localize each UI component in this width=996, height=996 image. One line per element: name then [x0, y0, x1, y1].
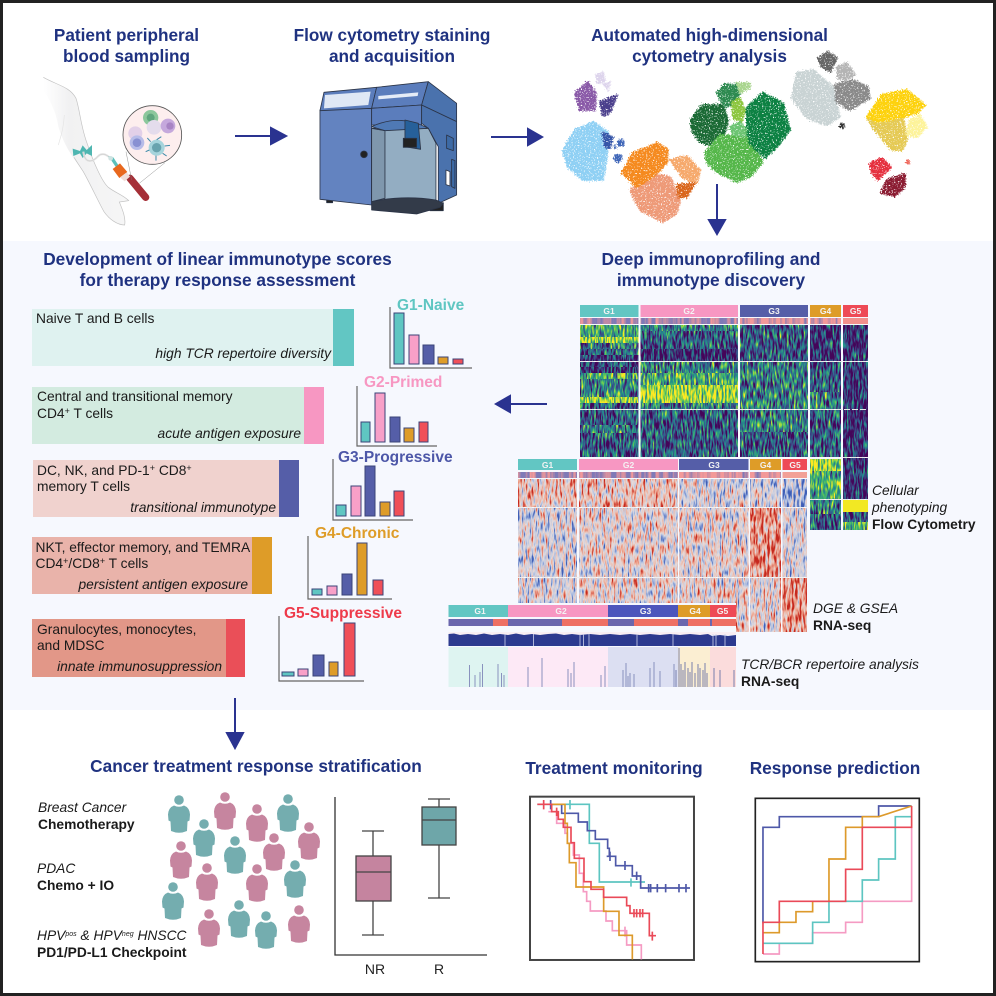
- heatmap: flow cytometry phenotyping: G2: [683, 306, 695, 316]
- chart: G4-Chronic bars: [308, 525, 400, 599]
- heatmap: flow cytometry phenotyping: [580, 305, 868, 530]
- panel: immunotype discovery band: [3, 241, 993, 710]
- panel: G2 primed description: Central and transitional memory: [37, 389, 233, 404]
- chart: G5-Suppressive bars: [279, 605, 402, 681]
- chart: TCR/BCR repertoire tracks: G2: [555, 606, 567, 616]
- panel: G4 chronic description: persistent antigen exposure: [77, 577, 248, 592]
- panel: G4 chronic description: NKT, effector memory, and TEMRA: [36, 540, 251, 555]
- panel: G3 progressive description: CD8: [155, 463, 187, 478]
- heading: deep immunoprofiling: Deep immunoprofiling and: [602, 249, 820, 269]
- chart: TCR/BCR repertoire tracks: [440, 603, 736, 693]
- heatmap: flow cytometry phenotyping: G5: [850, 306, 861, 316]
- heatmap: differential expression: G2: [623, 460, 634, 470]
- arrow: sampling to cytometer: [235, 128, 286, 144]
- chart: NR vs R box plot: NR: [365, 961, 385, 977]
- heatmap: flow cytometry phenotyping: G4: [820, 306, 831, 316]
- panel: G5 suppressive description: [32, 619, 245, 677]
- icon: arm with blood draw and tube: [43, 77, 182, 225]
- text: HNSCC cohort: pos: [64, 931, 77, 938]
- arrow: analysis to profiling: [709, 184, 725, 234]
- panel: G2 primed description: [32, 387, 324, 444]
- text: HNSCC cohort: & HPV: [77, 928, 124, 943]
- panel: G4 chronic description: [32, 537, 272, 594]
- panel: G4 chronic description: +: [100, 556, 105, 566]
- panel: G1 naive description: Naive T and B cells: [36, 311, 154, 326]
- panel: G3 progressive description: +: [150, 463, 155, 473]
- panel: G3 progressive description: DC, NK, and PD-1: [37, 463, 150, 478]
- text: HNSCC cohort: HPV: [37, 928, 67, 943]
- chart: TCR/BCR repertoire tracks: G5: [717, 606, 728, 616]
- heatmap: differential expression: G3: [708, 460, 720, 470]
- text: DGE label: RNA-seq: [813, 618, 871, 633]
- panel: G2 primed description: CD4: [37, 406, 65, 421]
- heading: automated analysis: Automated high-dimensional: [591, 25, 828, 45]
- chart: G4-Chronic bars: G4-Chronic: [315, 525, 400, 542]
- chart: G2-Primed bars: [357, 374, 442, 446]
- text: DGE label: DGE & GSEA: [813, 601, 898, 616]
- panel: G1 naive description: [32, 309, 354, 366]
- heading: flow cytometry: and acquisition: [329, 46, 455, 66]
- text: breast cancer cohort: Breast Cancer: [38, 800, 128, 815]
- panel: G4 chronic description: CD4: [36, 556, 63, 571]
- panel: G5 suppressive description: and MDSC: [37, 638, 105, 653]
- heatmap: differential expression: G1: [542, 460, 553, 470]
- panel: G1 naive description: high TCR repertoire diversity: [155, 346, 332, 361]
- heatmap: flow cytometry phenotyping: G1: [603, 306, 615, 316]
- heading: linear immunotype scores: Development of linear immunotype scores: [43, 249, 392, 269]
- panel: G2 primed description: acute antigen exposure: [158, 426, 301, 441]
- chart: G3-Progressive bars: G3-Progressive: [338, 449, 453, 466]
- text: HNSCC cohort: HNSCC: [134, 928, 188, 943]
- heading: blood sampling: Patient peripheral: [54, 25, 199, 45]
- panel: G4 chronic description: T cells: [105, 556, 148, 571]
- icon: flow cytometer: [320, 82, 457, 214]
- panel: G2 primed description: T cells: [70, 406, 113, 421]
- chart: TCR/BCR repertoire tracks: G1: [474, 606, 486, 616]
- heatmap: differential expression: [518, 459, 807, 632]
- text: cellular phenotyping label: phenotyping: [871, 500, 948, 515]
- text: HNSCC cohort: PD1/PD-L1 Checkpoint: [37, 945, 187, 960]
- heading: linear immunotype scores: for therapy response assessment: [80, 270, 356, 290]
- heading: cancer treatment stratification: Cancer treatment response stratification: [90, 756, 422, 776]
- text: PDAC cohort: PDAC: [37, 861, 76, 876]
- icons: patient cohort: [162, 792, 320, 949]
- panel: G4 chronic description: +: [63, 556, 68, 566]
- panel: G5 suppressive description: Granulocytes, monocytes,: [37, 622, 196, 637]
- heading: automated analysis: cytometry analysis: [632, 46, 787, 66]
- chart: TCR/BCR repertoire tracks: G4: [689, 606, 701, 616]
- chart: G1-Naive bars: [390, 297, 472, 368]
- heading: flow cytometry: Flow cytometry staining: [294, 25, 490, 45]
- panel: G5 suppressive description: innate immunosuppression: [57, 659, 222, 674]
- text: TCR/BCR label: RNA-seq: [741, 674, 799, 689]
- chart: G5-Suppressive bars: G5-Suppressive: [284, 605, 402, 622]
- panel: G3 progressive description: memory T cells: [37, 479, 130, 494]
- heading: deep immunoprofiling: immunotype discovery: [617, 270, 806, 290]
- heading: response prediction: Response prediction: [750, 758, 920, 778]
- text: PDAC cohort: Chemo + IO: [37, 878, 114, 893]
- arrow: cytometer to analysis: [491, 129, 542, 145]
- heatmap: differential expression: G5: [789, 460, 801, 470]
- arrow: profiling to scores: [496, 396, 547, 412]
- text: HNSCC cohort: neg: [122, 931, 134, 938]
- chart: response prediction ROC curves: [755, 798, 919, 962]
- text: breast cancer cohort: Chemotherapy: [38, 817, 135, 832]
- heatmap: flow cytometry phenotyping: G3: [768, 306, 780, 316]
- chart: NR vs R box plot: R: [434, 961, 444, 977]
- text: cellular phenotyping label: Flow Cytometry: [872, 517, 976, 532]
- chart: TCR/BCR repertoire tracks: G3: [640, 606, 651, 616]
- chart: tSNE clusters: [563, 52, 927, 222]
- chart: G2-Primed bars: G2-Primed: [364, 374, 442, 391]
- text: TCR/BCR label: TCR/BCR repertoire analysis: [741, 657, 919, 672]
- chart: G1-Naive bars: G1-Naive: [397, 297, 465, 314]
- chart: survival curves: [530, 797, 694, 960]
- chart: NR vs R box plot: [335, 797, 487, 977]
- heading: treatment monitoring: Treatment monitoring: [525, 758, 703, 778]
- heading: blood sampling: blood sampling: [63, 46, 190, 66]
- heatmap: differential expression: G4: [760, 460, 771, 470]
- text: cellular phenotyping label: Cellular: [872, 483, 920, 498]
- chart: G3-Progressive bars: [333, 449, 453, 520]
- panel: G3 progressive description: +: [186, 463, 192, 473]
- arrow: scores to stratification: [227, 698, 243, 748]
- panel: G3 progressive description: [33, 460, 299, 517]
- panel: G2 primed description: +: [65, 406, 70, 416]
- panel: G3 progressive description: transitional immunotype: [130, 500, 276, 515]
- panel: G4 chronic description: /CD8: [68, 556, 100, 571]
